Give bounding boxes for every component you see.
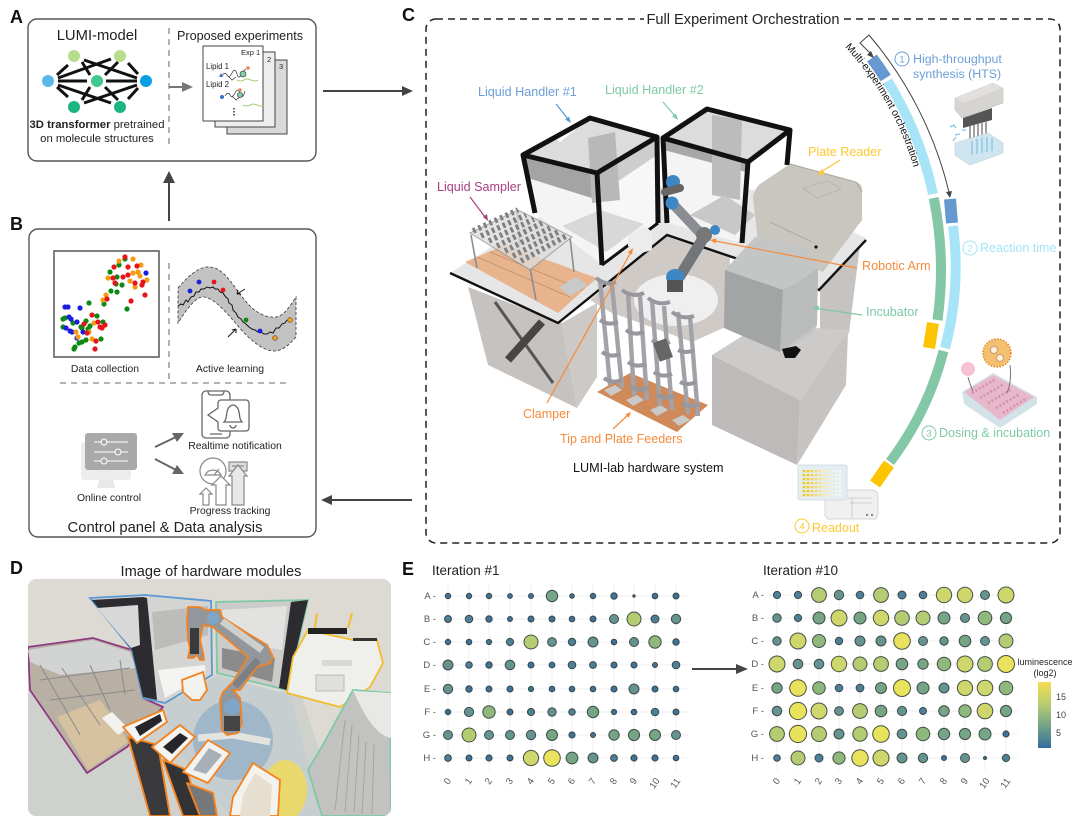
icon: readout plate and reader [798, 465, 878, 519]
incubator [724, 237, 818, 358]
label: Liquid Handler #1 [478, 85, 577, 123]
step 1 label: High-throughput synthesis [895, 52, 1002, 81]
bubble chart: iteration 10: 2 [813, 776, 825, 787]
label: Liquid Handler #1: Liquid Handler #1 [478, 85, 577, 99]
bubble chart: iteration 1: 0 [442, 776, 454, 787]
icon: notification phone and bell [202, 391, 249, 438]
bubble chart: iteration 1: F - [424, 707, 436, 718]
step 4 label: Readout [795, 519, 860, 535]
tip and plate feeders [596, 278, 708, 432]
arrows from online control [155, 433, 184, 474]
text: Active learning: Active learning [196, 364, 264, 375]
bubble chart: iteration 10: F - [752, 706, 764, 717]
label: Clamper [523, 248, 633, 421]
arrow: C to B [321, 495, 412, 505]
clamper block [628, 226, 652, 254]
step 2 label: Reaction time: Reaction time [980, 241, 1056, 255]
icon: cell plate and lipid nanoparticle [961, 339, 1037, 428]
arrow: model to experiments [169, 82, 193, 92]
bubble chart: iteration 10: H - [751, 753, 764, 764]
arrow: multi-experiment loop [860, 35, 952, 198]
label: Liquid Sampler [437, 180, 521, 221]
bubble chart: iteration 1: B - [424, 614, 436, 625]
bubble chart: iteration 10: 5 [875, 776, 887, 787]
bubble chart: iteration 10: 11 [999, 776, 1013, 791]
icon: neural network [42, 50, 152, 113]
text: model description: on molecule structures [40, 133, 154, 145]
bubble chart: iteration 1: 3 [504, 776, 516, 787]
heading: Iteration #1: Iteration #1 [432, 563, 500, 578]
panel label E: E [402, 559, 414, 579]
panel: full experiment orchestration [425, 12, 1061, 544]
bubble chart: iteration 1: H - [423, 753, 436, 764]
bubble chart: iteration 1: 9 [628, 776, 640, 787]
panel label B: B [10, 214, 23, 234]
module outline: liquid handler 2 [216, 600, 308, 690]
step 4 label: Readout: 4 [799, 522, 805, 532]
label: Robotic Arm: Robotic Arm [862, 259, 931, 273]
bubble chart: iteration 1: E - [424, 684, 436, 695]
bubble chart: iteration 1: 2 [483, 776, 495, 787]
bubble chart: iteration 10 [751, 584, 1018, 791]
label: Plate Reader [808, 145, 882, 175]
label: Robotic Arm [710, 238, 931, 273]
bubble chart: iteration 10: 8 [938, 776, 950, 787]
text: Data collection: Data collection [71, 364, 139, 375]
step 3 label: Dosing and incubation: 3 [926, 428, 932, 440]
icon: stacked experiment sheets [203, 46, 287, 134]
bubble chart: iteration 1: 7 [587, 776, 599, 787]
label: Tip and Plate Feeders: Tip and Plate Feeders [560, 432, 683, 446]
centre recess [590, 235, 730, 342]
legend: luminescence colour scale: 10 [1056, 710, 1066, 720]
legend: luminescence colour scale [1017, 657, 1073, 748]
liquid handler 1 [523, 118, 658, 265]
bubble chart: iteration 1: A - [424, 591, 436, 602]
right back cabinet [820, 245, 860, 335]
legend: luminescence colour scale: luminescence [1017, 657, 1073, 667]
legend: luminescence colour scale: (log2) [1033, 668, 1057, 678]
bubble chart: iteration 10: D - [751, 659, 764, 670]
heading: Control panel and Data analysis: Control panel & Data analysis [68, 520, 262, 536]
panel label A: A [10, 7, 23, 27]
arrow: iteration 1 to 10 [692, 664, 748, 674]
chart: active learning curve [178, 267, 296, 351]
icon: stacked experiment sheets: Lipid 2 [206, 80, 229, 89]
photo: hardware modules [28, 579, 391, 820]
bubble chart: iteration 1: 1 [463, 776, 475, 787]
heading: Proposed experiments: Proposed experiments [177, 29, 303, 43]
bubble chart: iteration 10: 1 [792, 776, 804, 787]
bubble chart: iteration 10: G - [751, 729, 764, 740]
text: Realtime notification: Realtime notification [188, 441, 282, 452]
text: Progress tracking: Progress tracking [190, 506, 271, 517]
panel label D: D [10, 558, 23, 578]
step 4 label: Readout: Readout [812, 521, 860, 535]
label: Incubator [812, 305, 919, 319]
scatter plot: data collection [54, 251, 159, 357]
bubble chart: iteration 10: 7 [917, 776, 929, 787]
bubble chart: iteration 1 [423, 584, 688, 791]
robotic arm [665, 175, 720, 292]
label: Liquid Sampler: Liquid Sampler [437, 180, 521, 194]
icon: online control monitor [81, 433, 137, 488]
panel: LUMI-model and proposed experiments [28, 19, 316, 161]
right cabinet [712, 325, 850, 465]
bubble chart: iteration 1: C - [423, 637, 436, 648]
bubble chart: iteration 10: 3 [833, 776, 845, 787]
step 2 label: Reaction time: 2 [967, 244, 973, 254]
bubble chart: iteration 10: A - [752, 590, 764, 601]
caption: LUMI-lab hardware system: LUMI-lab hardware system [573, 461, 723, 475]
text: Online control: Online control [77, 493, 141, 504]
arrow: B to A [163, 171, 175, 221]
bubble chart: iteration 10: 6 [896, 776, 908, 787]
module outline: incubator [308, 690, 391, 816]
wood platform and liquid sampler rack [465, 210, 597, 313]
bubble chart: iteration 10: 0 [771, 776, 783, 787]
bubble chart: iteration 10: 4 [854, 776, 866, 787]
bubble chart: iteration 1: 6 [566, 776, 578, 787]
legend: luminescence colour scale: 15 [1056, 692, 1066, 702]
module outline: clamper [182, 672, 207, 700]
bubble chart: iteration 10: E - [752, 683, 764, 694]
lab bench [450, 185, 866, 323]
bubble chart: iteration 1: D - [423, 660, 436, 671]
heading: Full Experiment Orchestration: Full Experiment Orchestration [646, 12, 840, 28]
icon: stacked experiment sheets: 3 [279, 62, 283, 71]
heading: Iteration #10: Iteration #10 [763, 563, 838, 578]
label: Clamper: Clamper [523, 407, 570, 421]
heading: Image of hardware modules: Image of hardware modules [121, 564, 301, 580]
step 3 label: Dosing and incubation: Dosing & incubation [939, 426, 1050, 440]
label: Tip and Plate Feeders [560, 412, 683, 446]
label: Plate Reader: Plate Reader [808, 145, 882, 159]
heading: LUMI-model: LUMI-model [57, 28, 137, 44]
label: Liquid Handler #2 [605, 83, 704, 120]
module outline: liquid sampler [28, 638, 163, 773]
bubble chart: iteration 1: 11 [669, 776, 683, 791]
illustration: LUMI-lab hardware system [450, 109, 866, 465]
module outline: plate reader [287, 613, 383, 707]
bubble chart: iteration 10: B - [752, 613, 764, 624]
panel label C: C [402, 5, 415, 25]
bubble chart: iteration 1: 5 [546, 776, 558, 787]
icon: stacked experiment sheets: Exp 1 [241, 48, 260, 57]
plate reader [753, 164, 862, 272]
liquid handler 2 [663, 109, 790, 243]
icon: progress gauge and arrows [200, 458, 247, 505]
module outline: liquid handler 1 [90, 595, 212, 703]
bubble chart: iteration 1: G - [423, 730, 436, 741]
bubble chart: iteration 10: C - [751, 636, 764, 647]
icon: stacked experiment sheets: 2 [267, 55, 271, 64]
text: Multi-experiment orchestration: Multi-experiment orchestration [846, 42, 918, 167]
bubble chart: iteration 10: 9 [959, 776, 971, 787]
text: model description: 3D transformer pretrained [29, 119, 165, 131]
module outline: robotic arm [187, 607, 273, 735]
dividers [60, 263, 291, 383]
icon: stacked experiment sheets: Lipid 1 [206, 62, 229, 71]
module outline: tip and plate feeders [123, 710, 280, 816]
step 1 label: High-throughput synthesis: 1 [899, 54, 905, 66]
left cabinet [468, 287, 597, 408]
divider [168, 28, 170, 146]
step 1 label: High-throughput synthesis: High-throughput [913, 52, 1002, 66]
step 1 label: High-throughput synthesis: synthesis (HTS) [913, 67, 1001, 81]
label: Liquid Handler #2: Liquid Handler #2 [605, 83, 704, 97]
bubble chart: iteration 1: 10 [647, 776, 662, 791]
timeline: experiment schedule arcs [872, 58, 956, 484]
panel: control panel and data analysis [29, 229, 316, 537]
icon: HTS pipette and plate [950, 83, 1003, 165]
bubble chart: iteration 1: 4 [525, 776, 537, 787]
legend: luminescence colour scale: 5 [1056, 728, 1061, 738]
arrow: A to C [323, 86, 413, 96]
bubble chart: iteration 1: 8 [608, 776, 620, 787]
label: Incubator: Incubator [866, 305, 919, 319]
bubble chart: iteration 10: 10 [977, 776, 992, 791]
